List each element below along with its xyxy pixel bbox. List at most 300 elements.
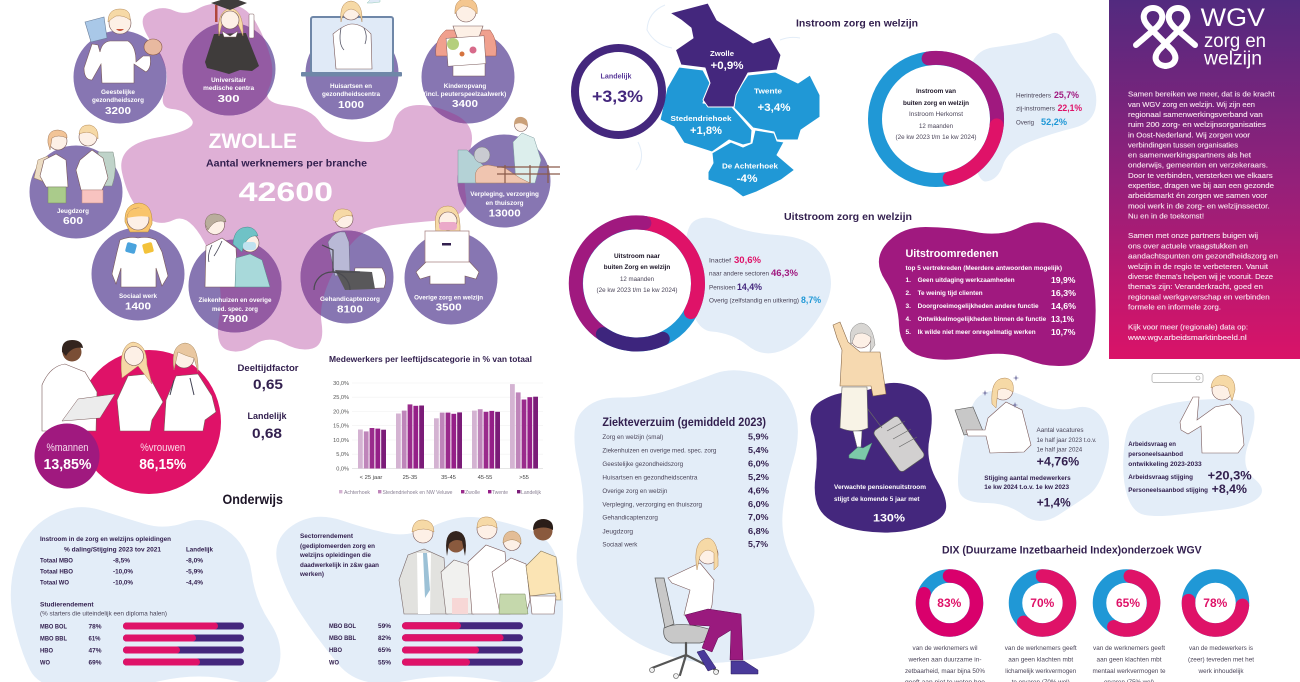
- branch circle: Verpleging, verzorging en thuiszorg: 13000: [489, 207, 521, 219]
- text block: partners: thema's zijn: Veranderkracht, goed en: [1128, 282, 1263, 291]
- y axis labels: 20,0%: [333, 410, 349, 416]
- blob background: [685, 218, 831, 353]
- x axis labels: 45-55: [478, 475, 492, 481]
- text block: partners: aandachtspunten om gezondheidszorg en: [1128, 252, 1278, 261]
- list: reasons: 5.: [906, 329, 911, 336]
- icon: doctor and nurse: [205, 214, 270, 287]
- icon: person with sign: [416, 206, 479, 284]
- progress bars: studierendement: 61%: [88, 635, 101, 642]
- label: Geestelijke: [101, 89, 135, 96]
- list: sick leave per branch: Sociaal werk: [602, 542, 638, 549]
- list: reasons: 16,3%: [1051, 288, 1076, 298]
- text: arbeidsvraag: [1128, 441, 1252, 496]
- legend: 8,7%: [801, 295, 821, 305]
- legend: 25,7%: [1054, 90, 1079, 100]
- text block: partners: ons over actuele vraagstukken en: [1128, 242, 1248, 250]
- region: Stedendriehoek: [660, 67, 752, 152]
- heading: Onderwijs: Onderwijs: [222, 491, 283, 507]
- list: sick leave per branch: Jeugdzorg: [602, 528, 633, 535]
- legend: 52,2%: [1041, 117, 1067, 127]
- legend: zij-instromers: [1016, 106, 1056, 112]
- donut text: 12 maanden: [919, 123, 954, 130]
- icon: person with book and brain: [84, 9, 162, 83]
- caption: 78%: (zeer) tevreden met het: [1188, 657, 1254, 664]
- branch circle: Ziekenhuizen en overige med. spec. zorg: med. spec. zorg: [212, 306, 258, 313]
- heading: studierendement: (% starters die uiteindelijk een diploma halen): [40, 610, 167, 617]
- text block: about: Nu en in de toekomst!: [1128, 212, 1204, 220]
- list: reasons: Te weinig tijd clienten: [918, 290, 983, 297]
- list: sick leave per branch: Geestelijke gezondheidszorg: [602, 461, 683, 468]
- legend: Inactief: [709, 258, 731, 264]
- text block: link: www.wgv.arbeidsmarktinbeeld.nl: [1127, 333, 1247, 342]
- heading: DIX onderzoek: DIX (Duurzame Inzetbaarheid Index)onderzoek WGV: [942, 544, 1202, 556]
- list: sick leave per branch: Gehandicaptenzorg: [602, 515, 658, 522]
- branch circle: Geestelijke gezondheidszorg: [74, 9, 166, 124]
- list: reasons: Ik wilde niet meer onregelmatig werken: [918, 329, 1036, 336]
- logo text: zorg en: [1204, 31, 1266, 52]
- donut: 83%: [922, 576, 976, 630]
- progress bars: sectorrendement: MBO BOL: [329, 623, 356, 630]
- legend: Achterhoek: [344, 490, 371, 496]
- map labels: [670, 49, 791, 185]
- branch circle: Verpleging, verzorging en thuiszorg: en thuiszorg: [486, 200, 524, 207]
- ring: Landelijk: [575, 48, 662, 135]
- label: vrouwen: %vrouwen: [140, 442, 185, 454]
- region: Zwolle: [670, 3, 781, 107]
- list: reasons: 2.: [906, 290, 911, 297]
- caption: 78%: van de medewerkers is: [1189, 645, 1254, 652]
- table: instroom: Totaal WO: [40, 579, 69, 586]
- legend: [339, 490, 541, 496]
- legend: Overig (zelfstandig en uitkering): [709, 298, 799, 304]
- text: arbeidsvraag: Arbeidsvraag stijging: [1128, 474, 1193, 481]
- progress bars: sectorrendement: WO: [329, 659, 339, 666]
- legend: Twente: [492, 490, 508, 496]
- blob background: [966, 33, 1096, 182]
- legend: [1016, 90, 1082, 127]
- text block: partners: formele en informele zorg.: [1128, 302, 1221, 312]
- branch circle: Universitair medische centra: medische centra: [203, 85, 254, 92]
- branch circle: Huisartsen en gezondheidscentra: gezondheidscentra: [322, 91, 380, 98]
- text: sectorrendement: (gediplomeerden zorg en: [300, 543, 375, 550]
- text block: partners: regionaal werkgeverschap en verbinden: [1128, 292, 1270, 301]
- panel: arbeidsvraag en personeelsaanbod: [1123, 374, 1262, 516]
- illustration: five colleagues: [399, 517, 561, 614]
- legend: Landelijk: [521, 490, 541, 496]
- list: reasons: 10,7%: [1051, 327, 1076, 337]
- text: stijgt de komende 5 jaar met: [834, 496, 920, 503]
- list: sick leave per branch: 4,6%: [748, 486, 769, 496]
- donut: 70%: 70%: [1030, 598, 1054, 610]
- map blob: Zwolle background: [121, 3, 472, 352]
- logo text: welzijn: [1203, 48, 1262, 70]
- branch circle: Kinderopvang: (incl. peuterspeelzaalwerk): [424, 91, 506, 98]
- text: arbeidsvraag: personeelsaanbod: [1128, 451, 1183, 458]
- panel: Uitstroomredenen: [879, 222, 1096, 366]
- table: instroom: [40, 536, 213, 586]
- donut chart: [875, 58, 997, 180]
- icon: nurse and patient in bed: [458, 117, 560, 183]
- text block: partners: welzijn in de regio te verbeteren. Vanuit: [1127, 262, 1268, 271]
- subtitle: Aantal werknemers per branche: Aantal werknemers per branche: [206, 158, 367, 170]
- branch circle: Gehandicaptenzorg: [300, 209, 394, 324]
- circle: mannen: [34, 424, 100, 488]
- donut text: buiten zorg en welzijn: [903, 100, 969, 107]
- caption: 83%: [905, 645, 985, 682]
- list: sick leave per branch: Huisartsen en gezondheidscentra: [602, 474, 698, 481]
- list: reasons: Geen uitdaging werkzaamheden: [918, 277, 1015, 284]
- legend: naar andere sectoren: [709, 270, 769, 278]
- list: reasons: Doorgroeimogelijkheden andere functie: [918, 303, 1039, 310]
- donut: 78%: 78%: [1203, 598, 1227, 610]
- branch circle: Geestelijke gezondheidszorg: 3200: [105, 105, 131, 117]
- panel: gender split: [34, 340, 221, 494]
- illustration: retiree with suitcase: [833, 322, 926, 473]
- list: sick leave per branch: 5,4%: [748, 445, 769, 455]
- text: sectorrendement: [299, 533, 379, 578]
- text block: Deeltijdfactor: Deeltijdfactor: [238, 363, 299, 373]
- text block: about: mooi werk in de zorg- en welzijnssector.: [1128, 202, 1270, 210]
- branch circle: Huisartsen en gezondheidscentra: 1000: [338, 99, 364, 111]
- caption: 70%: lichamelijk werkvermogen: [1005, 668, 1077, 675]
- donut: 65%: [1100, 576, 1154, 630]
- text block: Deeltijdfactor: [238, 363, 299, 441]
- legend: Zwolle: [465, 490, 480, 496]
- panel: pensioenuitstroom: [811, 322, 946, 533]
- heading: studierendement: Studierendement: [40, 601, 94, 608]
- text: stijging medewerkers: Stijging aantal medewerkers: [984, 475, 1071, 482]
- list: sick leave per branch: 5,2%: [748, 472, 769, 482]
- progress bars: sectorrendement: [329, 622, 523, 666]
- caption: 70%: [1005, 645, 1077, 682]
- list: sick leave per branch: 5,9%: [748, 432, 769, 442]
- legend: 22,1%: [1058, 103, 1082, 113]
- illustration: man pointing at search bar: [1152, 374, 1244, 453]
- table: instroom: -10,0%: [113, 579, 133, 586]
- donut text: [896, 88, 976, 141]
- list: reasons: 14,6%: [1051, 301, 1076, 311]
- panel: Ziekteverzuim: [574, 370, 814, 678]
- blob background: [276, 517, 563, 682]
- donut text: buiten Zorg en welzijn: [604, 264, 670, 271]
- label: mannen: 13,85%: [44, 456, 92, 473]
- text: arbeidsvraag: +20,3%: [1208, 468, 1252, 482]
- label: Jeugdzorg: [57, 208, 89, 215]
- text: arbeidsvraag: Personeelsaanbod stijging: [1128, 487, 1208, 494]
- branch circle: Kinderopvang: 3400: [452, 98, 478, 110]
- illustration: three doctors: [42, 340, 216, 431]
- list: reasons: 19,9%: [1051, 275, 1076, 285]
- text: arbeidsvraag: Arbeidsvraag en: [1128, 441, 1176, 448]
- table: instroom: Totaal HBO: [40, 568, 73, 575]
- y axis labels: 5,0%: [336, 452, 349, 458]
- branch circle: Jeugdzorg: 600: [63, 215, 83, 227]
- x axis labels: < 25 jaar: [360, 475, 382, 481]
- icon: child with drawing: [436, 0, 496, 76]
- progress bars: sectorrendement: 55%: [378, 659, 391, 666]
- text block: about: van WGV zorg en welzijn. Wij zijn een: [1128, 100, 1255, 109]
- branch circle: Kinderopvang: [422, 0, 514, 124]
- bars: 45-55: [472, 409, 500, 468]
- text: vacatures: Aantal vacatures: [1036, 427, 1084, 434]
- panel: sectorrendement: [276, 517, 563, 682]
- list: reasons: 3.: [906, 303, 911, 310]
- caption: 83%: zetbaarheid, maar bijna 50%: [905, 668, 985, 675]
- branch circle: Sociaal werk: 1400: [125, 300, 151, 312]
- y axis labels: 30,0%: [333, 381, 349, 387]
- heading: studierendement: [40, 601, 167, 617]
- heading: Uitstroomredenen: [906, 248, 999, 260]
- progress bars: sectorrendement: MBO BBL: [329, 635, 356, 642]
- list: reasons: [906, 275, 1076, 337]
- donut text: (2e kw 2023 t/m 1e kw 2024): [896, 134, 976, 141]
- heading: Ziekteverzuim (gemiddeld 2023): [602, 415, 766, 429]
- branch circle: Verpleging, verzorging en thuiszorg: [458, 117, 560, 228]
- progress bars: sectorrendement: HBO: [329, 647, 342, 654]
- map labels: Stedendriehoek: [670, 114, 732, 123]
- blob background: [811, 383, 946, 533]
- list: reasons: Ontwikkelmogelijkheden binnen de functie: [918, 316, 1047, 323]
- label: vrouwen: 86,15%: [139, 456, 186, 473]
- text: 130%: [873, 513, 905, 525]
- caption: 65%: [1092, 645, 1166, 682]
- progress bars: studierendement: HBO: [40, 647, 53, 654]
- list: sick leave per branch: 5,7%: [748, 539, 768, 549]
- donut text: [596, 253, 678, 294]
- region: Achterhoek: [708, 130, 794, 197]
- subheading: top 5 vertrekreden (Meerdere antwoorden mogelijk): [906, 265, 1062, 272]
- region: Twente: [734, 72, 820, 140]
- donut text: (2e kw 2023 t/m 1e kw 2024): [596, 287, 678, 294]
- text: sectorrendement: Sectorrendement: [300, 533, 354, 540]
- title: ZWOLLE: ZWOLLE: [209, 130, 297, 153]
- text block: partners: Samen met onze partners buigen wij: [1128, 231, 1258, 240]
- label: Universitair: [211, 77, 247, 84]
- icon: graduate: [205, 0, 259, 74]
- text block: partners: [1127, 231, 1278, 312]
- table: instroom: Totaal MBO: [40, 557, 73, 564]
- y axis labels: 0,0%: [336, 466, 349, 472]
- table: instroom: % daling/Stijging 2023 tov 2021: [64, 546, 161, 554]
- donut text: Instroom van: [916, 88, 956, 95]
- label: Kinderopvang: [444, 83, 486, 90]
- logo icon: ribbon loops: [1136, 8, 1195, 66]
- heading: Instroom zorg en welzijn: Instroom zorg en welzijn: [796, 18, 918, 30]
- list: sick leave per branch: Ziekenhuizen en overige med. spec. zorg: [602, 447, 717, 454]
- text: arbeidsvraag: ontwikkeling 2023-2033: [1128, 461, 1202, 468]
- legend: 14,4%: [737, 282, 762, 292]
- donut text: Uitstroom naar: [614, 253, 661, 260]
- legend: Overig: [1016, 120, 1034, 126]
- map labels: Twente: [754, 86, 782, 96]
- progress bars: sectorrendement: 82%: [378, 635, 391, 642]
- panel: Zwolle employees per branch: [30, 0, 560, 352]
- x axis labels: 25-35: [403, 475, 417, 481]
- blob background: [11, 507, 280, 682]
- panel: instroom opleidingen en studierendement: [11, 507, 280, 682]
- donut: 70%: [1016, 576, 1070, 630]
- legend: Stedendriehoek en NW Veluwe: [382, 490, 453, 496]
- illustration: woman on office chair with back pain: [650, 538, 758, 678]
- panel: DIX donuts: [905, 576, 1254, 682]
- ring: Landelijk: +3,3%: [592, 87, 643, 106]
- donut: 65%: 65%: [1116, 598, 1140, 610]
- label: mannen: [44, 442, 92, 473]
- list: reasons: 13,1%: [1051, 314, 1074, 324]
- table: instroom: -8,5%: [113, 557, 130, 564]
- text block: about: arbeidsmarkt én zorgen we samen voor: [1128, 191, 1268, 200]
- caption: 65%: aan geen klachten mbt: [1096, 657, 1162, 664]
- text: vacatures: [1036, 427, 1097, 468]
- bars: >55: [510, 384, 538, 468]
- donut: 83%: 83%: [937, 598, 961, 610]
- total number: 42600: [239, 177, 333, 207]
- progress bars: sectorrendement: 65%: [378, 647, 391, 654]
- text: sectorrendement: daadwerkelijk in z&w gaan: [300, 562, 379, 569]
- list: sick leave per branch: Overige zorg en welzijn: [602, 488, 668, 495]
- text block: link: [1127, 322, 1248, 342]
- list: sick leave per branch: [602, 432, 769, 549]
- map labels: +0,9%: [710, 60, 744, 72]
- list: sick leave per branch: Zorg en welzijn (smal): [602, 434, 663, 441]
- donut text: 12 maanden: [620, 276, 655, 283]
- text: vacatures: 1e half jaar 2023 t.o.v.: [1036, 437, 1097, 444]
- branch circle: Huisartsen en gezondheidscentra: [301, 0, 402, 120]
- y axis labels: [333, 381, 349, 472]
- chart title: Medewerkers per leeftijdscategorie in % van totaal: [329, 354, 532, 364]
- bars: < 25 jaar: [358, 428, 386, 468]
- blob background: [574, 370, 814, 663]
- legend: 30,6%: [734, 255, 761, 265]
- branch circle: Overige zorg en welzijn: [404, 206, 498, 324]
- list: sick leave per branch: 6,0%: [748, 458, 769, 468]
- y axis labels: 10,0%: [333, 438, 349, 444]
- table: instroom: -10,0%: [113, 568, 133, 575]
- text: vacatures: 1e half jaar 2024: [1036, 446, 1083, 454]
- text block: about: Samen bereiken we meer, dat is de kracht: [1128, 90, 1275, 98]
- text block: about: [1128, 90, 1275, 220]
- legend: [709, 255, 821, 305]
- x axis labels: >55: [519, 475, 529, 481]
- label: Gehandicaptenzorg: [320, 296, 380, 303]
- table: instroom: -5,9%: [186, 568, 203, 575]
- legend: Herintreders: [1016, 92, 1052, 100]
- branch circle: Overige zorg en welzijn: 3500: [436, 302, 462, 314]
- caption: 70%: van de werknemers geeft: [1005, 645, 1077, 652]
- caption: 65%: mentaal werkvermogen te: [1092, 668, 1166, 675]
- progress bars: studierendement: 78%: [88, 623, 102, 630]
- map labels: -4%: [736, 173, 758, 185]
- text block: Deeltijdfactor: Landelijk: [248, 411, 287, 421]
- blob background: [879, 222, 1096, 366]
- text: stijging medewerkers: +1,4%: [1037, 496, 1071, 510]
- map labels: Zwolle: [710, 49, 734, 58]
- bars: 25-35: [396, 404, 424, 468]
- text block: link: Kijk voor meer (regionale) data op:: [1128, 322, 1248, 332]
- caption: 65%: van de werknemers geeft: [1093, 645, 1165, 652]
- text block: Deeltijdfactor: 0,65: [253, 376, 283, 392]
- text block: about: ruim 200 zorg- en welzijnsorganisaties: [1128, 120, 1266, 129]
- icon: two school kids: [34, 125, 115, 203]
- progress bars: studierendement: MBO BBL: [40, 635, 67, 642]
- branch circle: Universitair medische centra: 300: [218, 93, 240, 105]
- blob background: [958, 390, 1109, 521]
- panel: instroom donut: [875, 33, 1096, 182]
- text block: about: onderwijs, gemeenten en verzekeraars.: [1128, 160, 1268, 170]
- table: instroom: -4,4%: [186, 579, 203, 586]
- caption: 78%: [1188, 645, 1254, 675]
- label: Sociaal werk: [119, 293, 157, 300]
- caption: 78%: werk inhoudelijk: [1198, 668, 1244, 675]
- text block: about: regionaal samenwerkingsverband van: [1128, 110, 1263, 119]
- logo text: [1201, 4, 1266, 70]
- map labels: De Achterhoek: [722, 162, 779, 170]
- branch circle: Gehandicaptenzorg: 8100: [337, 304, 363, 316]
- text block: Deeltijdfactor: 0,68: [252, 425, 282, 441]
- branch circle: Universitair medische centra: [182, 0, 276, 116]
- table: instroom: Instroom in de zorg en welzijns opleidingen: [40, 536, 171, 543]
- label: Overige zorg en welzijn: [414, 294, 483, 302]
- text: [834, 484, 926, 525]
- icon: person holding puzzle pieces: [112, 203, 168, 287]
- map labels: +3,4%: [758, 102, 791, 114]
- label: Verpleging, verzorging: [470, 191, 539, 198]
- bars: 35-45: [434, 412, 462, 468]
- text block: partners: diverse thema's helpen wij je vooruit. Deze: [1128, 272, 1273, 281]
- table: instroom: Landelijk: [186, 546, 213, 554]
- branch circle: Ziekenhuizen en overige med. spec. zorg: [188, 214, 282, 332]
- text: sectorrendement: welzijns opleidingen die: [299, 552, 371, 559]
- icon: person in wheelchair: [314, 209, 386, 290]
- list: sick leave per branch: Verpleging, verzorging en thuiszorg: [602, 501, 702, 508]
- y axis labels: 15,0%: [333, 424, 349, 430]
- progress bars: studierendement: 47%: [88, 647, 102, 654]
- label: Huisartsen en: [330, 83, 372, 90]
- progress bars: studierendement: [40, 622, 244, 666]
- legend: 46,3%: [771, 268, 798, 278]
- text: sectorrendement: werken): [299, 571, 324, 578]
- progress bars: sectorrendement: 59%: [378, 623, 391, 630]
- text block: about: en samenwerkingspartners als het: [1128, 150, 1251, 160]
- label: vrouwen: [139, 442, 186, 473]
- list: sick leave per branch: 7,0%: [748, 512, 769, 522]
- text: vacatures: +4,76%: [1037, 454, 1080, 468]
- caption: 83%: van de werknemers wil: [912, 645, 978, 652]
- list: reasons: 1.: [906, 277, 911, 284]
- text block: about: verbindingen tussen organisaties: [1128, 140, 1238, 150]
- branch circle: Sociaal werk: [92, 203, 184, 320]
- progress bars: studierendement: 69%: [88, 659, 102, 666]
- donut text: Instroom Herkomst: [909, 111, 963, 118]
- progress bars: studierendement: WO: [40, 659, 50, 666]
- panel: uitstroom donut: [576, 218, 831, 353]
- blob background: [1123, 399, 1262, 516]
- text block: about: in Oost-Nederland. Wij zorgen voor: [1128, 130, 1251, 139]
- caption: 83%: werken aan duurzame in-: [908, 657, 982, 664]
- branch circle: Jeugdzorg: [30, 125, 122, 238]
- text block: about: expertise, dragen we bij aan een gezonde: [1128, 181, 1274, 190]
- text block: about: Door te verbinden, versterken we elkaars: [1128, 171, 1273, 180]
- branch circle: Geestelijke gezondheidszorg: gezondheidszorg: [92, 97, 144, 104]
- heading: Uitstroom zorg en welzijn: Uitstroom zorg en welzijn: [784, 211, 912, 223]
- caption: 70%: aan geen klachten mbt: [1008, 657, 1073, 664]
- bar chart: age categories: [329, 354, 543, 496]
- text: stijging medewerkers: [984, 475, 1071, 510]
- legend: Pensioen: [709, 284, 736, 292]
- donut chart: [576, 222, 698, 345]
- label: Ziekenhuizen en overige: [198, 297, 272, 304]
- map: regions: [660, 3, 820, 197]
